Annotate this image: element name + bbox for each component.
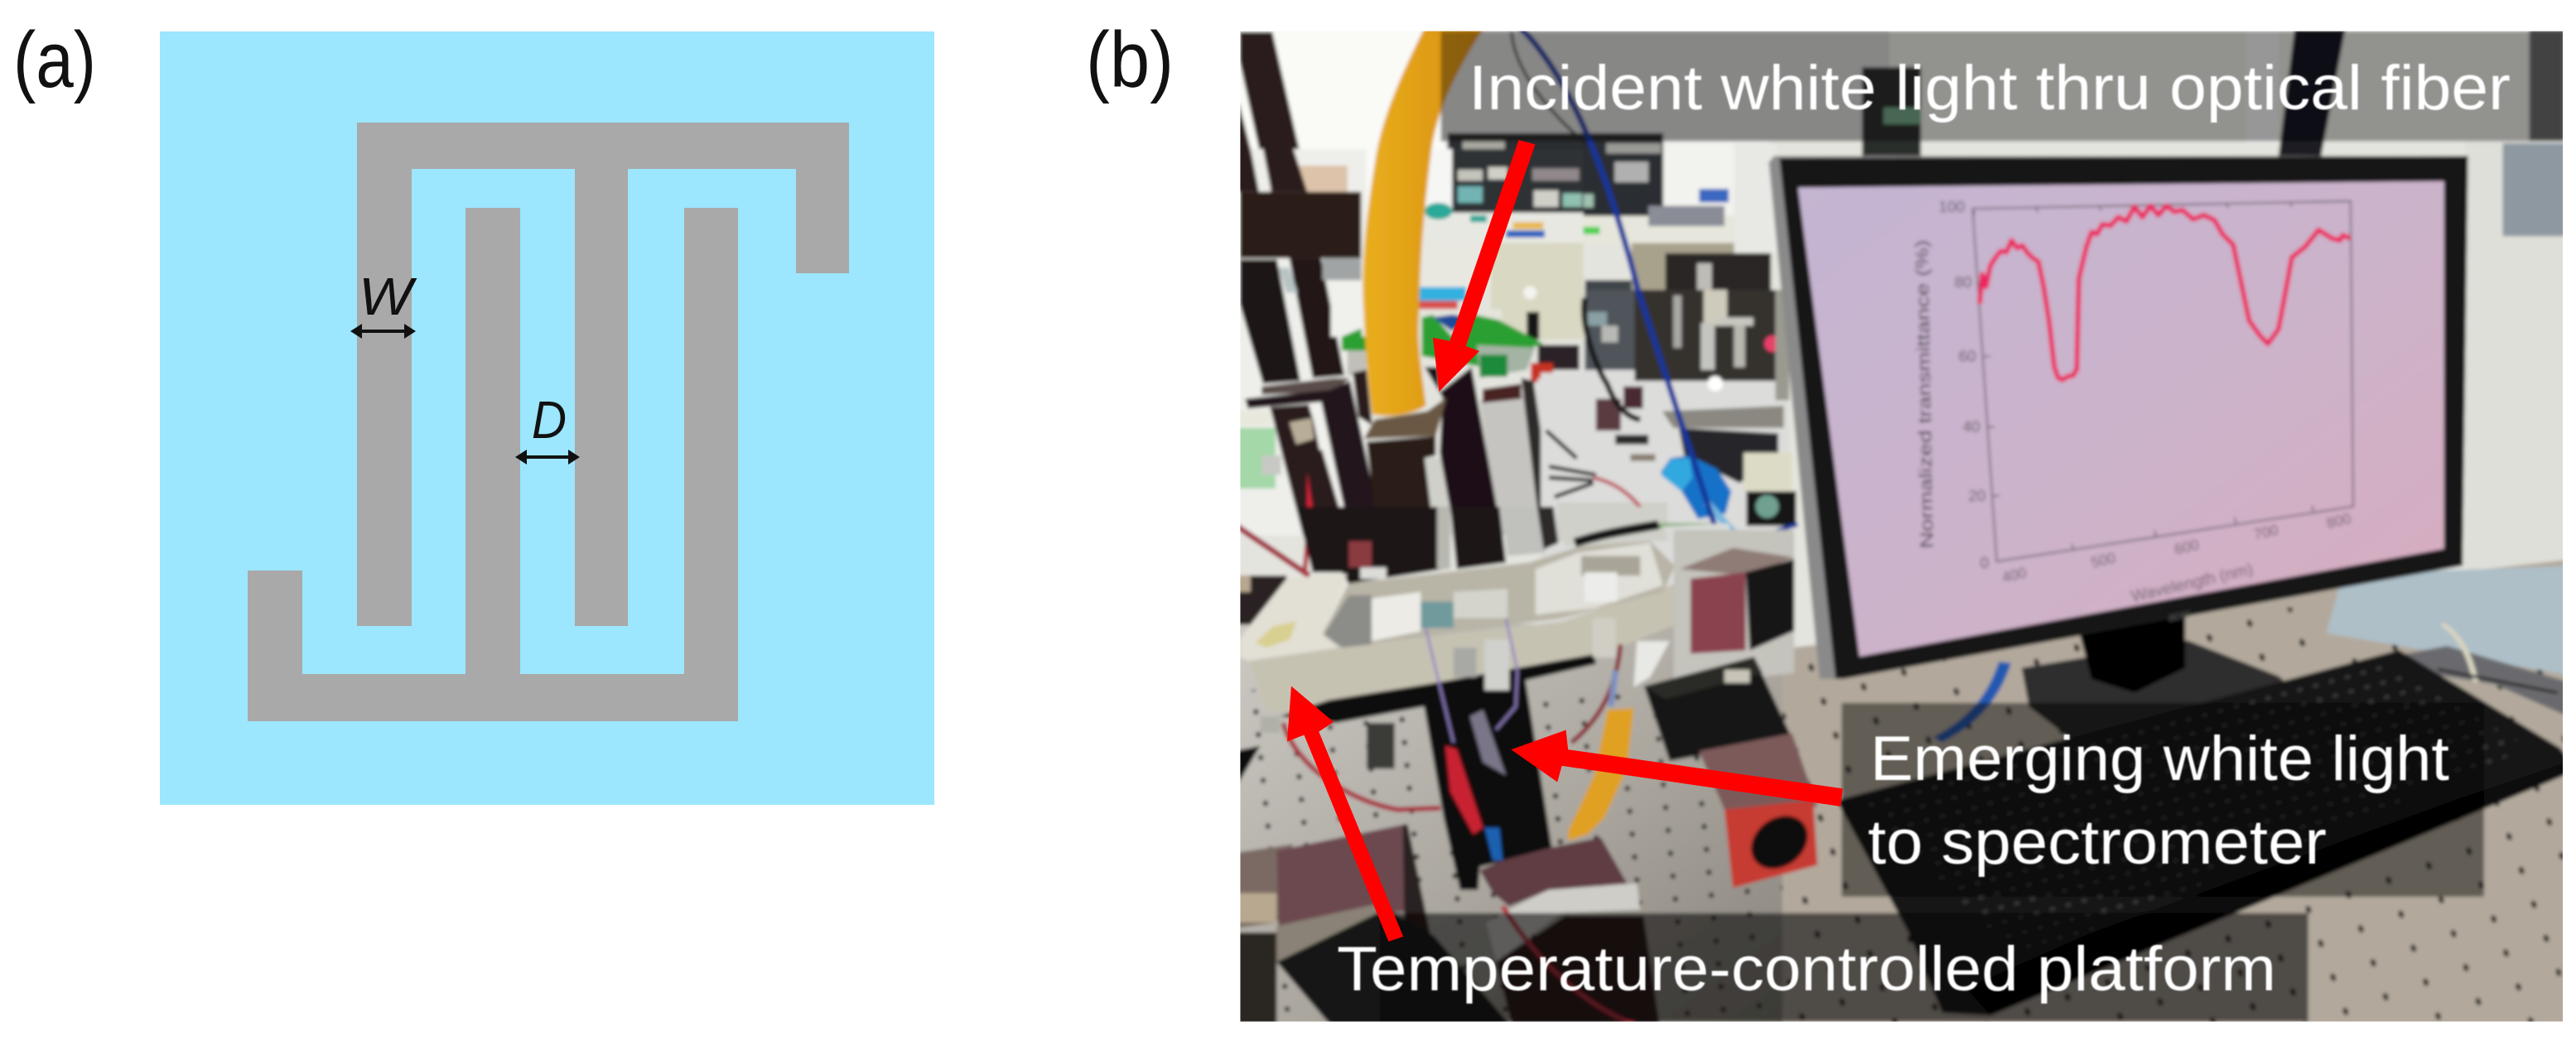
chart y tick labels: 20: [1968, 487, 1985, 504]
chart x tick labels: 600: [2173, 536, 2201, 558]
monitor bezel: [1779, 156, 2468, 679]
chart y axis title: Normalized transmittance (%): [1911, 240, 1937, 549]
blocks and magnetic base: [1644, 530, 1818, 888]
banner: incident light: [1440, 31, 2563, 142]
table hole pattern left: [1224, 690, 1782, 1038]
shelf and counter: [1445, 146, 1456, 212]
chart x tick labels: 500: [2090, 549, 2117, 571]
caption: emerging light line two: to spectrometer: [1868, 807, 2327, 878]
banner: emerging light: [1841, 703, 2484, 897]
transmittance chart on screen: [1973, 201, 2353, 561]
chart x axis title: Wavelength (nm): [2130, 561, 2255, 606]
arrow: incident light: [1433, 140, 1535, 392]
keyboard keys: [1864, 665, 2530, 961]
monitor outer edge: [1767, 152, 2324, 681]
arrow: temperature-controlled platform: [1287, 686, 1403, 941]
red wires: [1283, 723, 1440, 810]
lower centre box: [1479, 837, 1627, 906]
panel b: photograph of measurement setup: [1209, 0, 2576, 1038]
lower comb electrode: [248, 208, 738, 721]
optical table lower left: [1224, 624, 1782, 1038]
rear right background: [1731, 31, 2563, 257]
chart y tick labels: [1939, 198, 1989, 571]
tray well two: [1536, 543, 1663, 615]
arrow: emerging light: [1511, 730, 1843, 806]
chart x tick labels: 700: [2252, 522, 2280, 543]
monitor: [1768, 156, 2468, 679]
panel a: meander electrode schematic: [160, 31, 934, 805]
caption: emerging light line one: Emerging white light: [1870, 724, 2449, 794]
transmittance curve: [1980, 206, 2351, 380]
dark foreground: [1276, 906, 1512, 1028]
chart x tick labels: 400: [2000, 564, 2028, 585]
panel label (b): (b): [1086, 16, 1174, 104]
yellow protective tube: [1363, 27, 1484, 416]
monitor brand: acer: [2167, 606, 2192, 624]
upper comb electrode: [357, 123, 849, 626]
chart y tick labels: 100: [1939, 198, 1965, 215]
platform and foreground instruments: [1228, 507, 1735, 1028]
width label W: W: [359, 267, 417, 326]
banner: platform: [1380, 913, 2308, 1022]
keyboard body: [1836, 650, 2576, 1016]
chart x tick labels: 800: [2325, 510, 2352, 532]
blue optical cable: [1517, 25, 1720, 542]
rear bench and blue object: [1537, 286, 1800, 556]
tray body: [1249, 582, 1683, 713]
yellow tube piece: [1568, 708, 1633, 840]
chart y tick labels: 40: [1963, 418, 1980, 436]
caption: platform: Temperature-controlled platform: [1337, 934, 2276, 1004]
upper stand bars: [1239, 31, 1300, 152]
table hole pattern right: [1779, 605, 2563, 1022]
lower left boxes: [1228, 844, 1293, 929]
panel label (a): (a): [13, 16, 96, 104]
table surface: [1534, 375, 1543, 384]
gap arrow: [515, 450, 580, 465]
width arrow: [350, 324, 416, 339]
gap label D: D: [532, 390, 567, 450]
grey instrument: [1480, 395, 1541, 536]
chart y tick labels: 0: [1980, 554, 1989, 571]
tray well one: [1323, 542, 1675, 648]
paper right of monitor: [2327, 566, 2572, 676]
caption: incident light: Incident white light thru optical fiber: [1469, 53, 2511, 123]
green bag: [1422, 315, 1543, 367]
monitor screen: [1798, 181, 2444, 657]
optical table lower right: [1782, 558, 2576, 1038]
top background behind banner: [1240, 31, 1889, 293]
black cable: [1512, 31, 1590, 148]
tray top left: [1239, 574, 1347, 661]
chart y tick labels: 60: [1959, 347, 1976, 364]
chart x tick labels: [2000, 510, 2352, 585]
left apparatus: [1232, 27, 1585, 536]
monitor stand and keyboard: [1836, 607, 2576, 1016]
black mounting stand: [1280, 654, 1596, 890]
metal fittings: [1454, 648, 1477, 677]
fibre holder block: [1364, 433, 1438, 511]
crocodile clips: [1445, 746, 1483, 835]
chart y tick labels: 80: [1955, 273, 1972, 291]
